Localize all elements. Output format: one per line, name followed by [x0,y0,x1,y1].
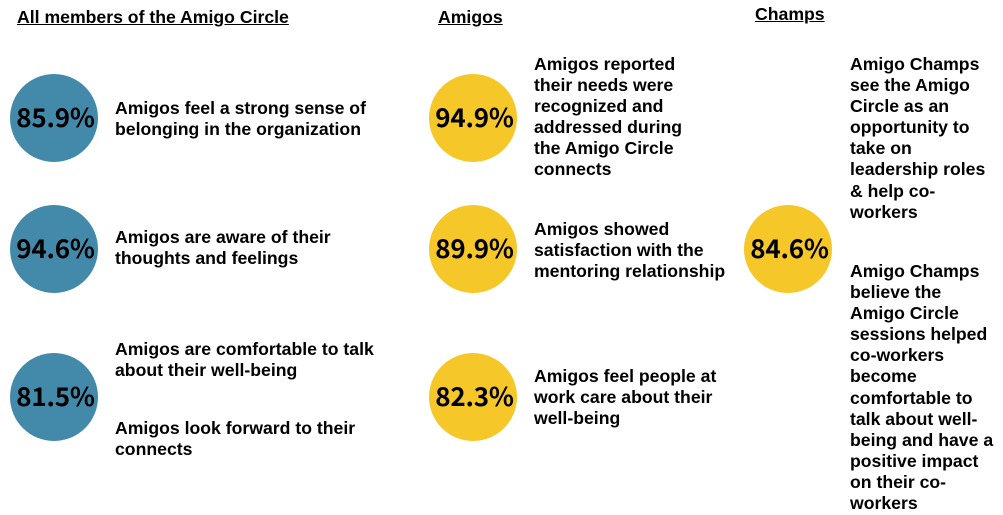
text: champs sessions impact: positive impact [850,451,978,471]
stat circle 94.9%: 94.9% [435,98,514,135]
text: champs sessions impact: on their co- [850,472,946,492]
text: champs leadership: take on [850,138,912,158]
stat circle 85.9% [10,74,98,162]
text: champs leadership [850,54,985,222]
stat circle 81.5% [10,353,98,441]
text: aware of thoughts: thoughts and feelings [115,248,298,268]
text: champs sessions impact: believe the [850,282,941,302]
text: people care: Amigos feel people at [534,366,716,386]
text: champs leadership: opportunity to [850,117,970,137]
heading: all members: All members of the Amigo Circle [17,7,289,27]
text: champs sessions impact: co-workers [850,345,944,365]
stat circle 82.3% [429,353,517,441]
text: champs sessions impact: workers [850,493,918,513]
text: needs recognized: the Amigo Circle [534,138,674,158]
text: people care: work care about their [534,387,712,407]
text: champs leadership: & help co- [850,181,935,201]
text: needs recognized: addressed during [534,117,682,137]
text: champs sessions impact: talk about well- [850,409,977,429]
text: needs recognized: Amigos reported [534,54,675,74]
text: champs leadership: Circle as an [850,96,949,116]
text: champs leadership: workers [850,202,918,222]
text: champs sessions impact: comfortable to [850,388,973,408]
heading: champs: Champs [755,4,825,24]
text: champs leadership: Amigo Champs [850,54,979,74]
text: champs sessions impact: Amigo Champs [850,261,979,281]
text: champs sessions impact: become [850,366,917,386]
text: people care: well-being [534,408,620,428]
text: comfortable and look forward [115,339,374,459]
text: comfortable and look forward: about their well-being Amigos look forward to their [115,360,355,438]
text: champs sessions impact: Amigo Circle [850,303,959,323]
text: champs leadership: leadership roles [850,159,985,179]
text: needs recognized [534,54,682,179]
text: aware of thoughts: Amigos are aware of their [115,227,331,247]
stat circle 84.6% [744,205,832,293]
text: comfortable and look forward: Amigos are comfortable to talk [115,339,374,359]
text: sense of belonging: Amigos feel a strong sense of [115,98,366,118]
heading: amigos: Amigos [438,7,503,27]
text: mentoring satisfaction: mentoring relationship [534,261,725,281]
stat circle 84.6%: 84.6% [750,229,829,266]
stat circle 82.3%: 82.3% [435,377,514,414]
text: champs sessions impact: being and have a [850,430,993,450]
text: comfortable and look forward: connects [115,439,192,459]
stat circle 94.9% [429,74,517,162]
text: mentoring satisfaction: Amigos showed [534,219,669,239]
text: needs recognized: connects [534,159,611,179]
text: sense of belonging [115,98,366,139]
text: needs recognized: recognized and [534,96,663,116]
stat circle 94.6% [10,205,98,293]
stat circle 81.5%: 81.5% [16,377,95,414]
text: champs leadership: see the Amigo [850,75,970,95]
stat circle 89.9% [429,205,517,293]
stat circle 89.9%: 89.9% [435,229,514,266]
stat circle 94.6%: 94.6% [16,229,95,266]
stat circle 85.9%: 85.9% [16,98,95,135]
text: mentoring satisfaction: satisfaction with the [534,240,704,260]
text: aware of thoughts [115,227,331,268]
text: sense of belonging: belonging in the organization [115,119,361,139]
text: mentoring satisfaction [534,219,725,281]
text: champs sessions impact [850,261,994,513]
text: people care [534,366,716,428]
text: champs sessions impact: sessions helped [850,324,987,344]
text: needs recognized: their needs were [534,75,673,95]
